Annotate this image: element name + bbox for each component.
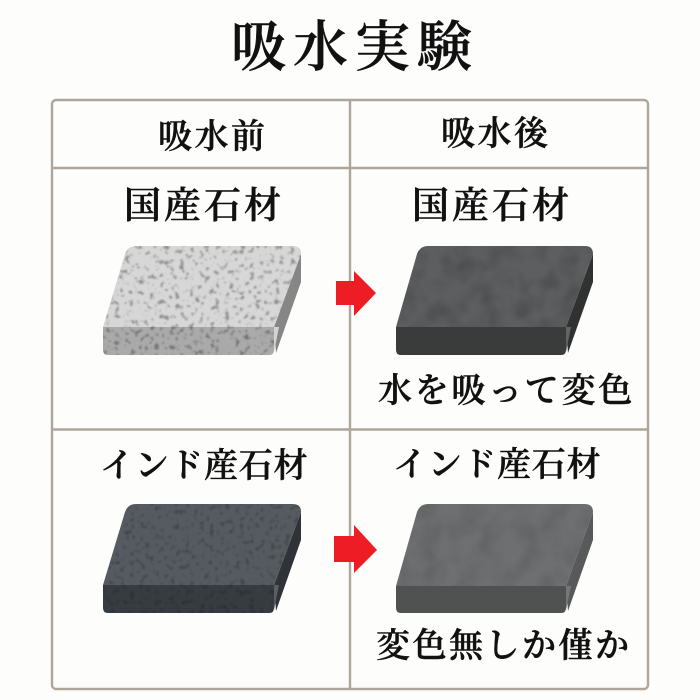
caption: changes colour after absorbing water: 水を吸って変色	[378, 372, 635, 410]
label: domestic stone, after: 国産石材	[412, 185, 572, 227]
label: domestic stone, before: 国産石材	[124, 185, 284, 227]
column heading: before absorption: 吸水前	[158, 118, 268, 156]
stone: Indian before	[100, 502, 304, 615]
stone: domestic after	[393, 244, 596, 355]
comparison table frame	[52, 100, 648, 689]
column heading: after absorption: 吸水後	[441, 115, 550, 153]
arrow: Indian stone	[334, 525, 377, 573]
stone: domestic before	[100, 244, 304, 357]
label: Indian stone, before: インド産石材	[100, 447, 308, 485]
title: 吸水実験	[231, 17, 479, 78]
stone: Indian after	[393, 502, 596, 613]
arrow: domestic stone	[336, 271, 376, 316]
label: Indian stone, after: インド産石材	[393, 446, 601, 484]
caption: little or no colour change: 変色無しか僅か	[376, 627, 632, 665]
